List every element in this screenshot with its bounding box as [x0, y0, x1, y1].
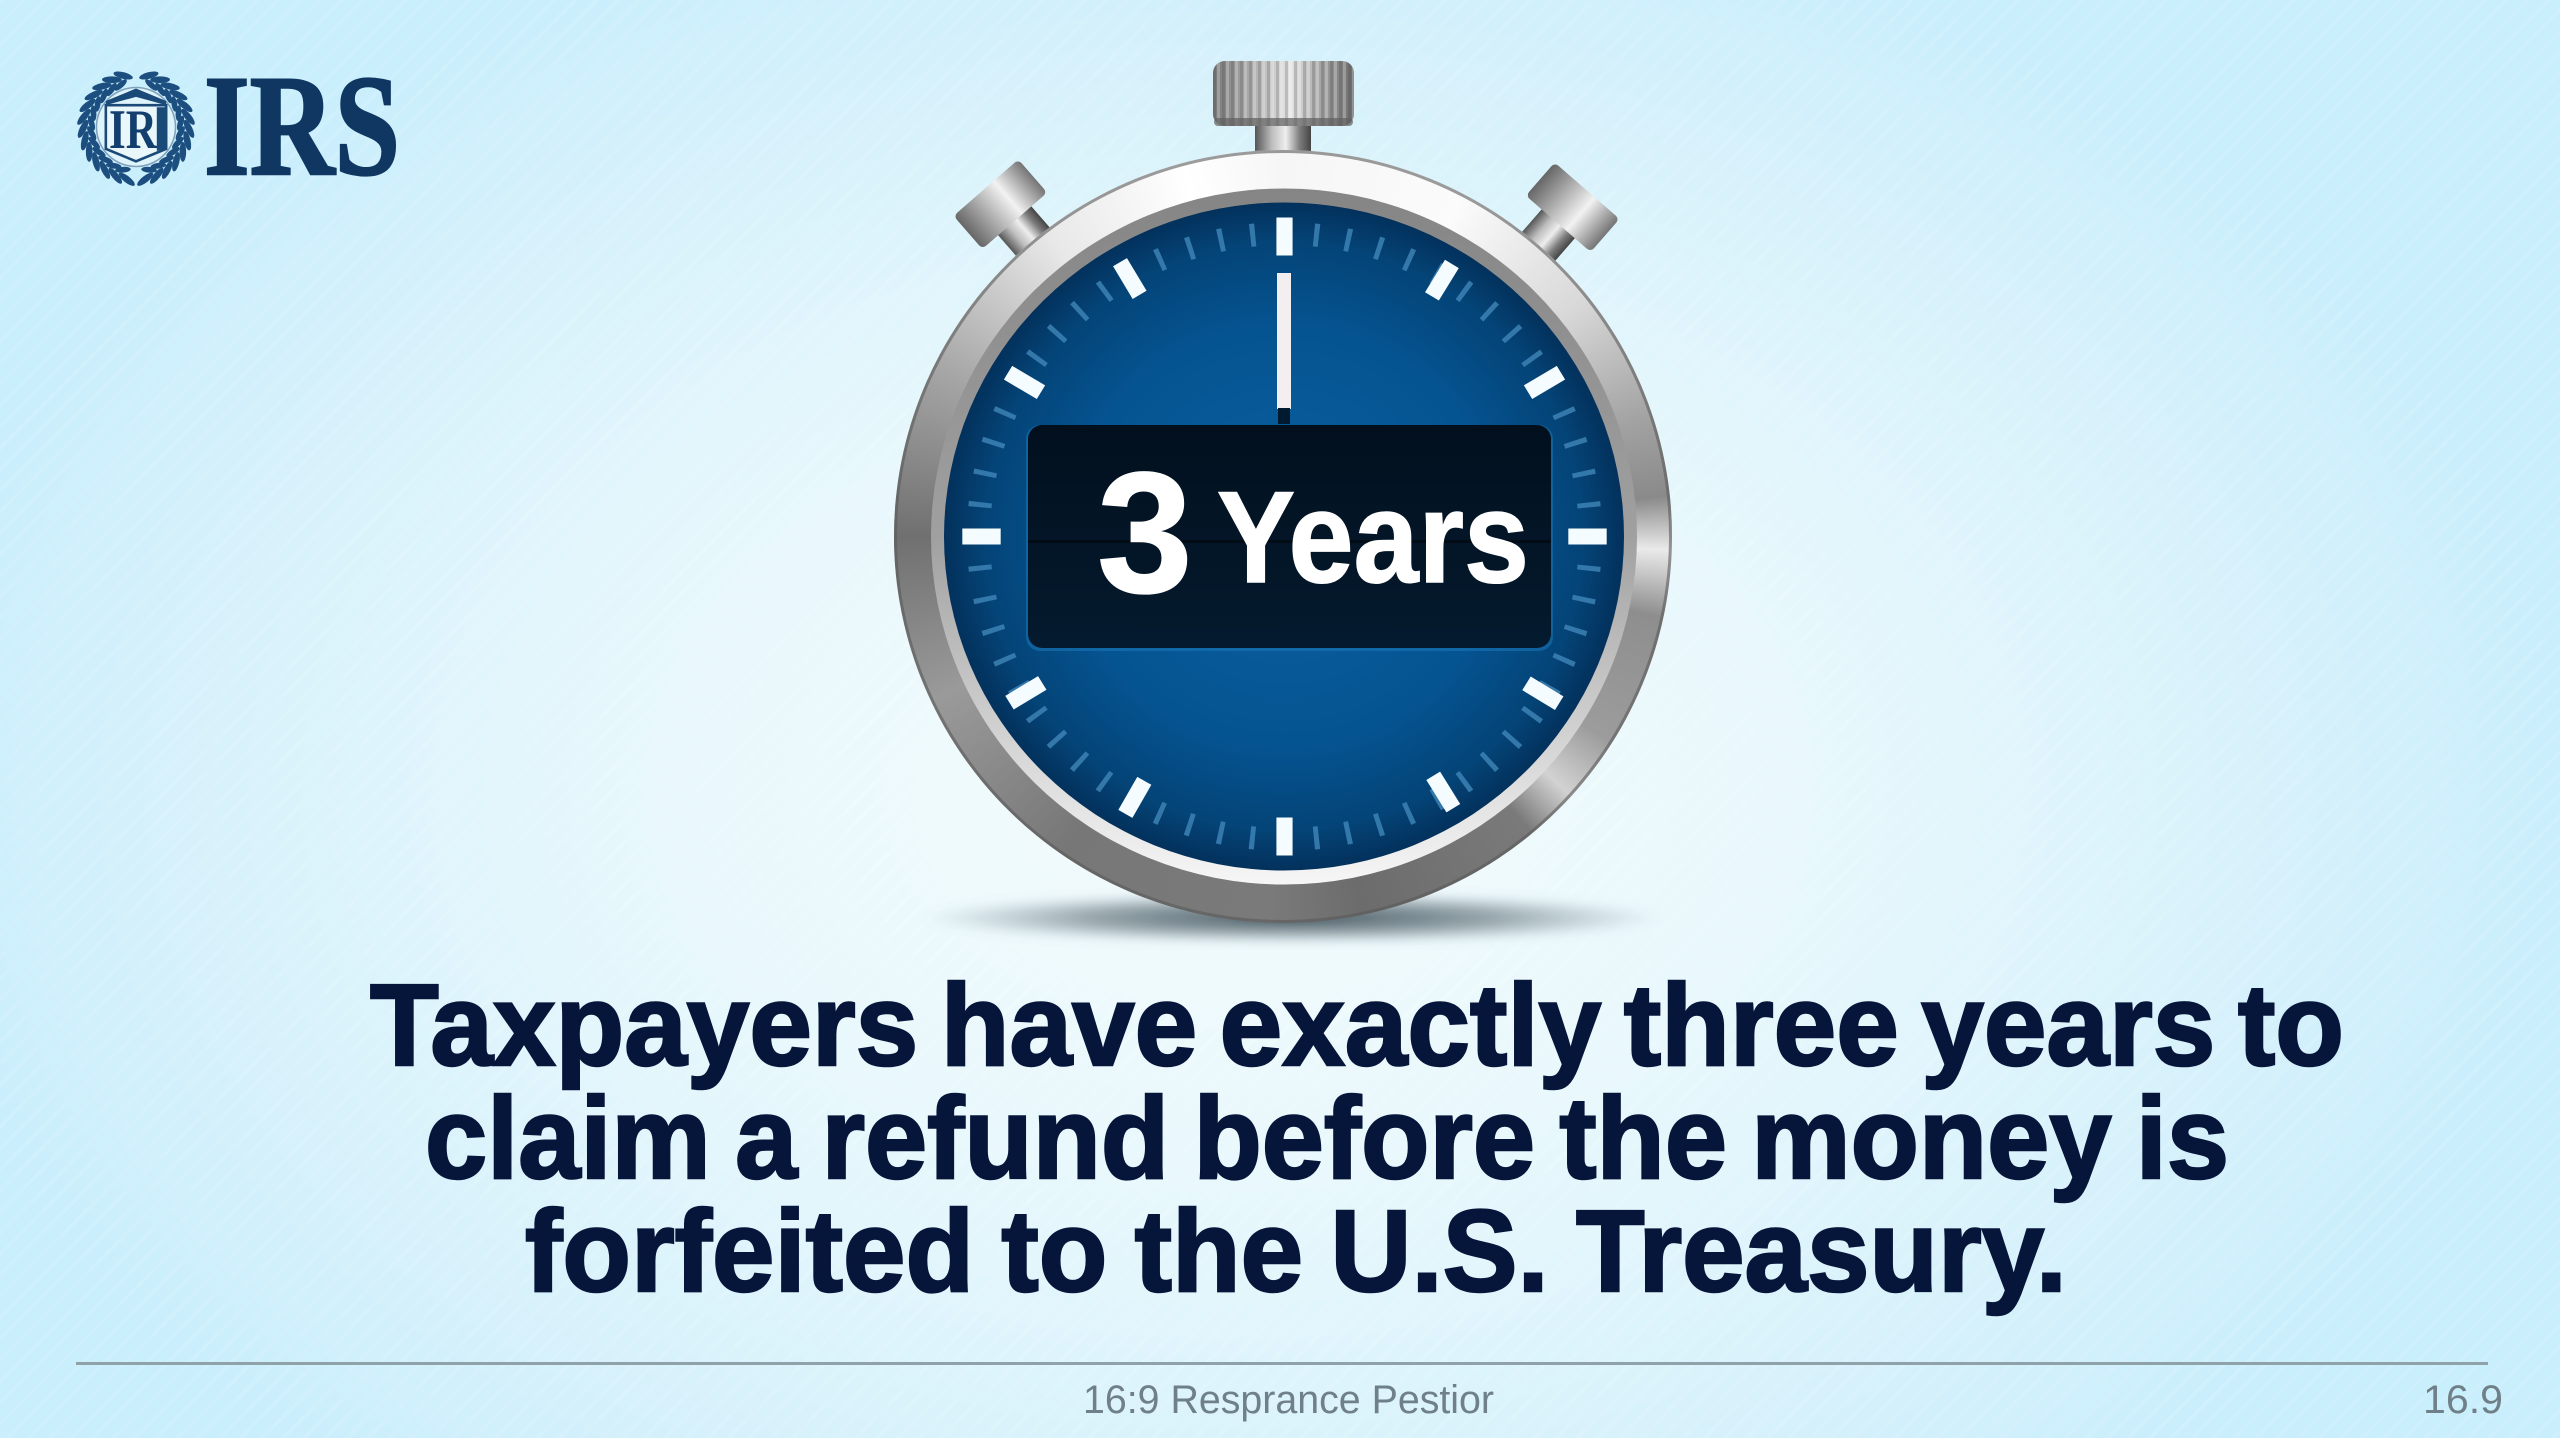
headline: Taxpayers have exactly three years to — [370, 960, 2344, 1090]
stopwatch illustration — [894, 61, 1672, 946]
clock hand — [1277, 273, 1291, 424]
left pusher — [953, 159, 1084, 291]
footer text — [1083, 1378, 2503, 1422]
minor tick marks — [978, 234, 1591, 840]
display text: 3 Years: Years — [1217, 464, 1529, 610]
ground shadow — [920, 892, 1664, 944]
icon: laurel wreath seal: IR — [109, 99, 158, 161]
logo: IRS emblem and wordmark — [77, 64, 400, 186]
right pusher — [1489, 162, 1620, 294]
crown button — [1213, 61, 1354, 154]
dark display panel — [1026, 425, 1553, 651]
footer text: 16.9 — [2423, 1378, 2503, 1422]
icon: laurel wreath seal — [75, 70, 197, 188]
metal case ring — [894, 150, 1672, 923]
headline — [370, 960, 2344, 1316]
display text: 3 Years — [1097, 437, 1529, 629]
footer text: 16:9 Resprance Pestior — [1083, 1378, 1494, 1422]
major tick marks — [962, 218, 1607, 856]
blue dial — [944, 202, 1624, 870]
headline: claim a refund before the money is — [425, 1073, 2229, 1203]
footer rule — [76, 1362, 2488, 1365]
inner bevel — [931, 188, 1637, 884]
display text: 3 Years: 3 — [1097, 437, 1193, 629]
stopwatch hardware: shadow, crown and side pushers — [944, 61, 1640, 946]
headline: forfeited to the U.S. Treasury. — [525, 1186, 2067, 1316]
stopwatch face — [931, 188, 1637, 884]
